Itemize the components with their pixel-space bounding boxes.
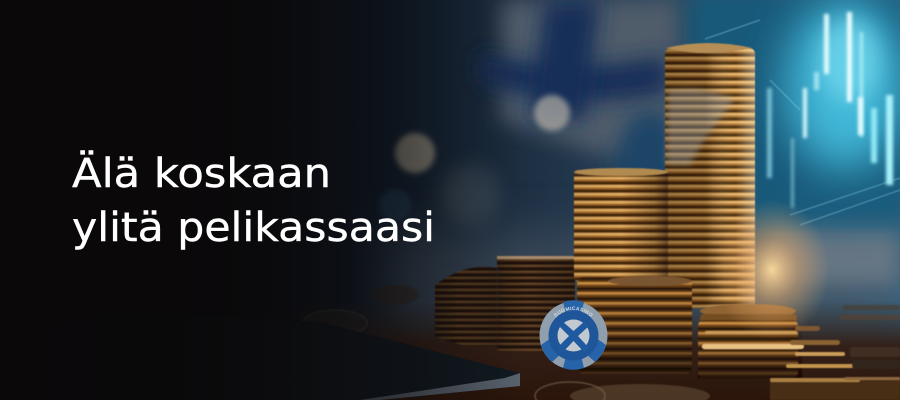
bokeh lights bbox=[379, 95, 570, 225]
coin stack: far left bbox=[435, 267, 497, 346]
warm light glow bbox=[714, 200, 830, 340]
coin stack: front right bbox=[698, 304, 804, 378]
coins on table bbox=[303, 285, 710, 400]
cyan chart glow bbox=[690, 0, 900, 230]
laptop bbox=[0, 312, 520, 400]
title: Älä koskaan bbox=[72, 149, 331, 197]
title: ylitä pelikassaasi bbox=[72, 205, 435, 251]
badge text: SUOMICASINO bbox=[554, 306, 592, 317]
blurred Finnish flag bbox=[480, 0, 685, 240]
logo badge: Suomi Casino Opas bbox=[540, 300, 608, 370]
coin stack: middle bbox=[574, 168, 668, 282]
table surface bbox=[300, 300, 900, 400]
coin piles: right bbox=[770, 305, 900, 400]
coin stack: tall bbox=[665, 43, 755, 308]
coin stack: middle lower bbox=[577, 276, 692, 374]
coin stack: left bbox=[497, 256, 575, 352]
